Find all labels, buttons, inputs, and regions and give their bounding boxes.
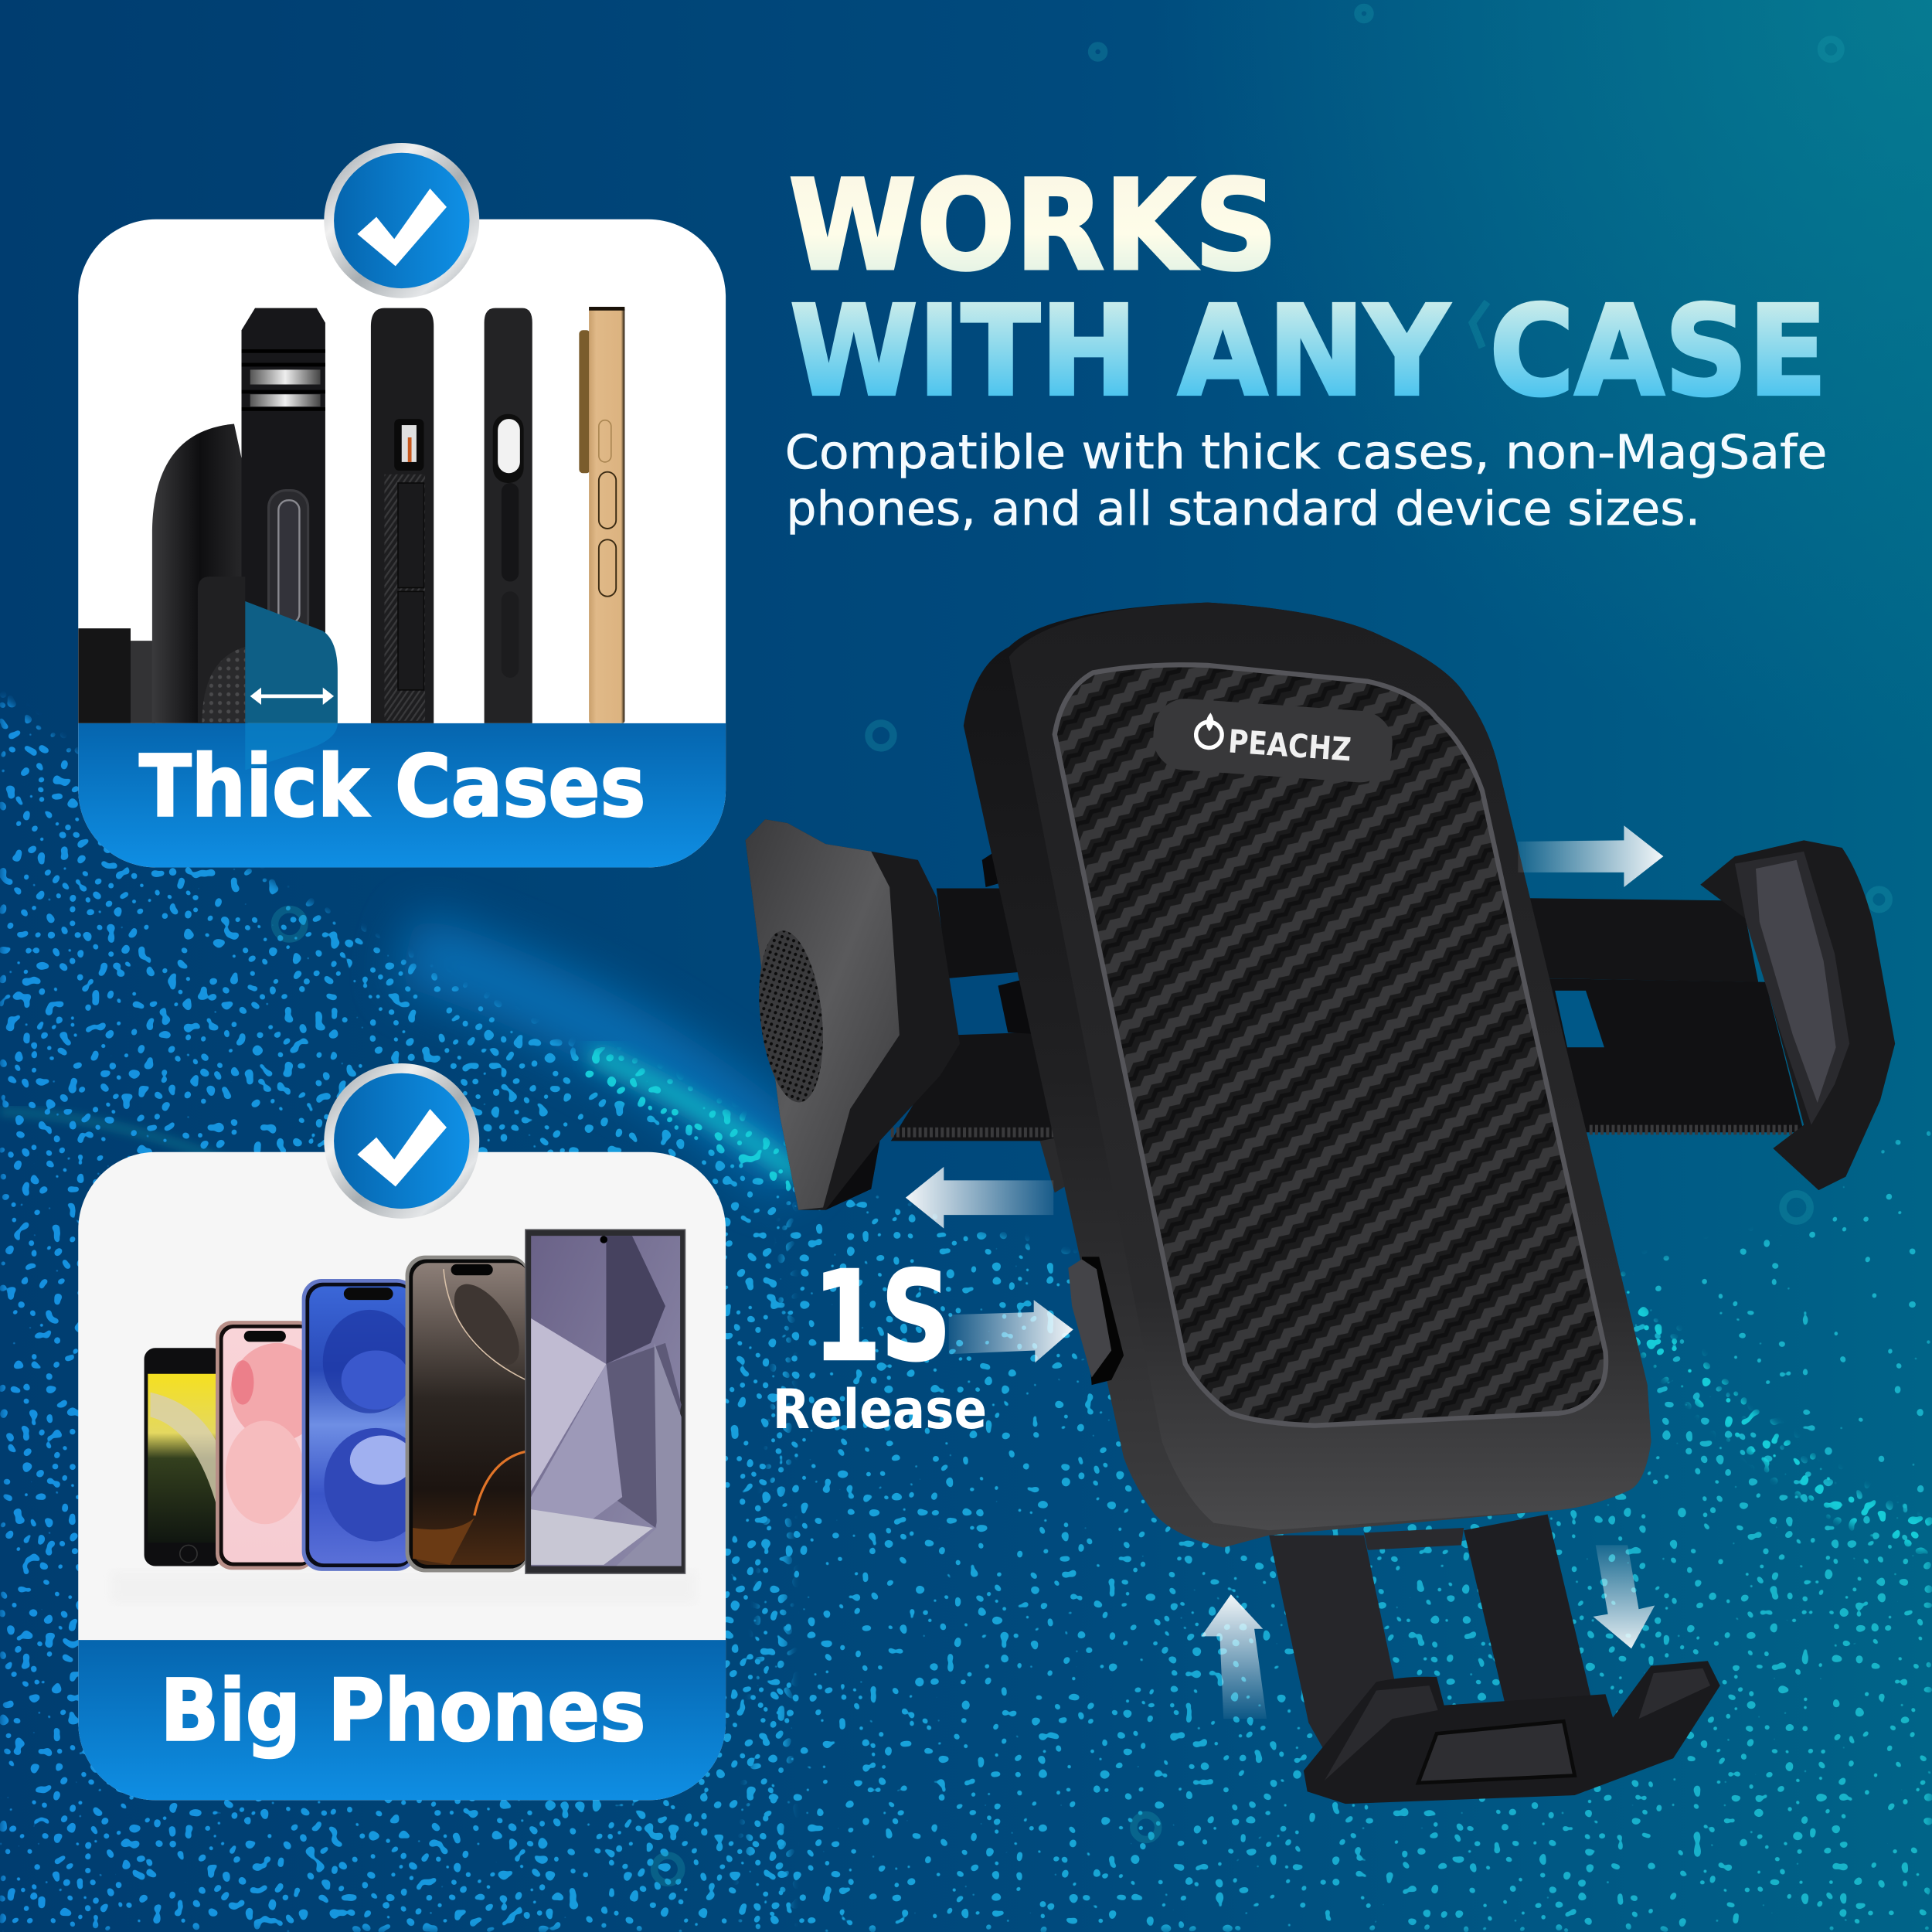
arrow: release xyxy=(949,1300,1073,1362)
release button xyxy=(1068,1257,1124,1385)
title: WITH ANY CASE xyxy=(790,279,1827,423)
left arms xyxy=(891,827,1078,1141)
arrow: left xyxy=(906,1167,1053,1229)
arrow: down xyxy=(1594,1545,1655,1648)
card background xyxy=(78,219,726,867)
band xyxy=(78,723,726,867)
translucent grip over band xyxy=(245,723,338,770)
holder body xyxy=(964,603,1651,1548)
case 3 xyxy=(485,308,532,723)
bracket xyxy=(1040,1134,1093,1192)
band xyxy=(78,1640,726,1800)
subtitle: phones, and all standard device sizes. xyxy=(786,482,1700,536)
logo xyxy=(1195,712,1353,768)
case illustrations xyxy=(78,307,726,867)
particle wave: thin upper right field xyxy=(1650,1131,1930,1513)
logo: PEACHZ xyxy=(1227,723,1352,768)
arrow: right xyxy=(1518,825,1663,887)
carbon panel xyxy=(1055,665,1606,1426)
foot hook xyxy=(1304,1661,1720,1804)
right arms xyxy=(1529,898,1804,1132)
particle wave: sparse right field xyxy=(736,1187,1932,1932)
foot stems xyxy=(1269,1515,1594,1762)
phone 3 xyxy=(302,1279,427,1571)
logo pill xyxy=(1151,696,1395,784)
phone 2 xyxy=(216,1321,324,1570)
panel: big phones xyxy=(78,1063,726,1800)
grip xyxy=(198,577,245,723)
check badge xyxy=(324,143,479,298)
phone 4 xyxy=(406,1256,532,1572)
reflection shadow xyxy=(111,1571,696,1603)
phone 1 xyxy=(145,1348,223,1566)
particle wave: bright ridge xyxy=(574,1047,1932,1554)
1S label: 1S xyxy=(813,1245,951,1389)
label: thick cases: Thick Cases xyxy=(139,736,645,835)
teal clear grip xyxy=(245,601,338,723)
title: WORKS xyxy=(788,154,1277,298)
left grip xyxy=(746,819,960,1210)
arrow: up xyxy=(1202,1594,1267,1719)
case 2 xyxy=(371,308,434,723)
particle wave: dense left field xyxy=(0,693,795,1932)
holder base xyxy=(78,628,131,723)
check badge xyxy=(324,1063,479,1219)
subtitle: Compatible with thick cases, non-MagSafe xyxy=(785,426,1827,480)
panel: thick cases xyxy=(78,143,726,867)
phones row xyxy=(78,1230,726,1800)
phone 5 xyxy=(526,1230,685,1573)
rugged case xyxy=(241,308,325,653)
label: big phones: Big Phones xyxy=(160,1661,645,1760)
holder front face xyxy=(1009,603,1651,1530)
gold phone xyxy=(579,330,590,473)
card background xyxy=(78,1152,726,1800)
release label: Release xyxy=(773,1378,987,1441)
car mount product xyxy=(746,603,1895,1804)
wave glow xyxy=(0,949,801,1177)
title xyxy=(788,154,1827,423)
subtitle xyxy=(785,426,1827,536)
right grip xyxy=(1700,840,1895,1190)
width arrow xyxy=(250,688,334,705)
